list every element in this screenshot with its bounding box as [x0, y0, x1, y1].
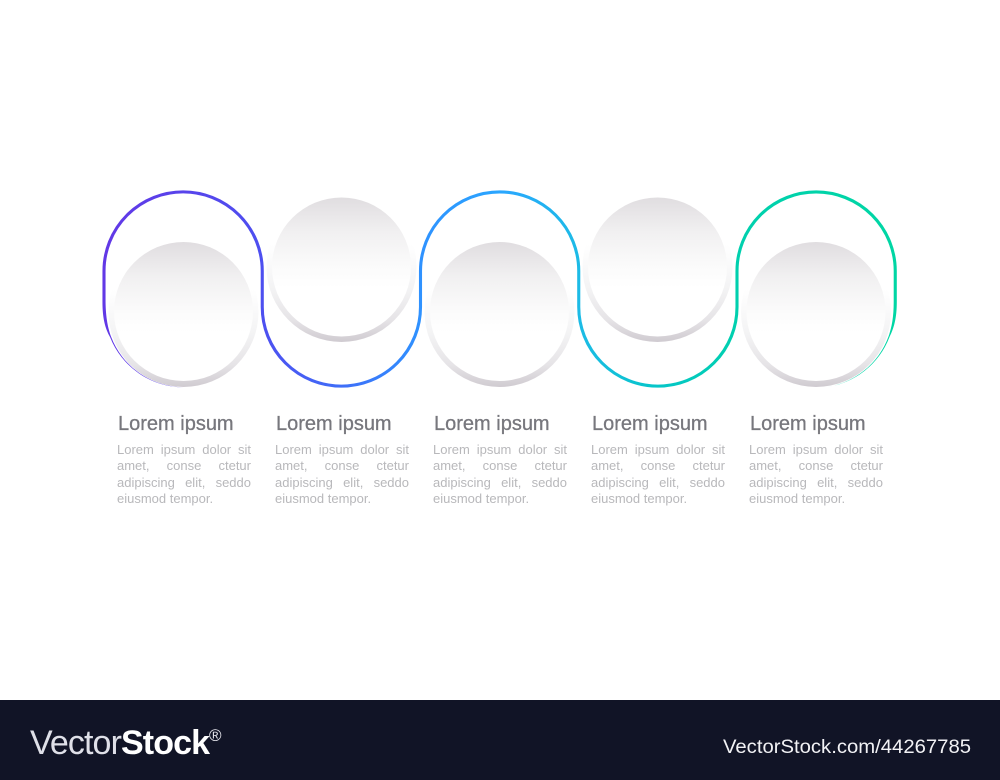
footer bar	[0, 700, 1000, 780]
text block 5: eiusmod tempor.	[749, 491, 845, 506]
image url: VectorStock.com/44267785	[723, 737, 971, 758]
registered mark: ®	[209, 726, 222, 745]
text block 3: Lorem ipsum dolor sit	[433, 442, 567, 457]
text block 1: amet, conse ctetur	[117, 458, 251, 473]
text block 4: amet, conse ctetur	[591, 458, 725, 473]
text block 2: eiusmod tempor.	[275, 491, 371, 506]
text block 1: Lorem ipsum	[118, 413, 234, 435]
text block 3: eiusmod tempor.	[433, 491, 529, 506]
connected gradient outline	[102, 192, 897, 387]
text block 1: Lorem ipsum dolor sit	[117, 442, 251, 457]
text block 3: Lorem ipsum	[434, 413, 550, 435]
disc 4	[582, 192, 732, 342]
text block 1	[117, 413, 251, 506]
text block 2: adipiscing elit, seddo	[275, 475, 409, 490]
disc 3	[424, 237, 574, 387]
disc 2	[266, 192, 416, 342]
text block 2: Lorem ipsum	[276, 413, 392, 435]
text block 5: adipiscing elit, seddo	[749, 475, 883, 490]
text block 4	[591, 413, 725, 506]
text block 1: adipiscing elit, seddo	[117, 475, 251, 490]
disc 1	[108, 237, 258, 387]
text block 2	[275, 413, 409, 506]
text block 5: Lorem ipsum dolor sit	[749, 442, 883, 457]
text block 3: adipiscing elit, seddo	[433, 475, 567, 490]
text block 2: Lorem ipsum dolor sit	[275, 442, 409, 457]
text block 3	[433, 413, 567, 506]
text block 2: amet, conse ctetur	[275, 458, 409, 473]
text block 4: Lorem ipsum dolor sit	[591, 442, 725, 457]
text block 4: eiusmod tempor.	[591, 491, 687, 506]
text block 1: eiusmod tempor.	[117, 491, 213, 506]
text block 5: Lorem ipsum	[750, 413, 866, 435]
disc 5	[741, 237, 891, 387]
text block 4: Lorem ipsum	[592, 413, 708, 435]
text block 4: adipiscing elit, seddo	[591, 475, 725, 490]
text block 5: amet, conse ctetur	[749, 458, 883, 473]
logo wordmark: VectorStock	[30, 724, 210, 762]
text block 3: amet, conse ctetur	[433, 458, 567, 473]
text block 5	[749, 413, 883, 506]
